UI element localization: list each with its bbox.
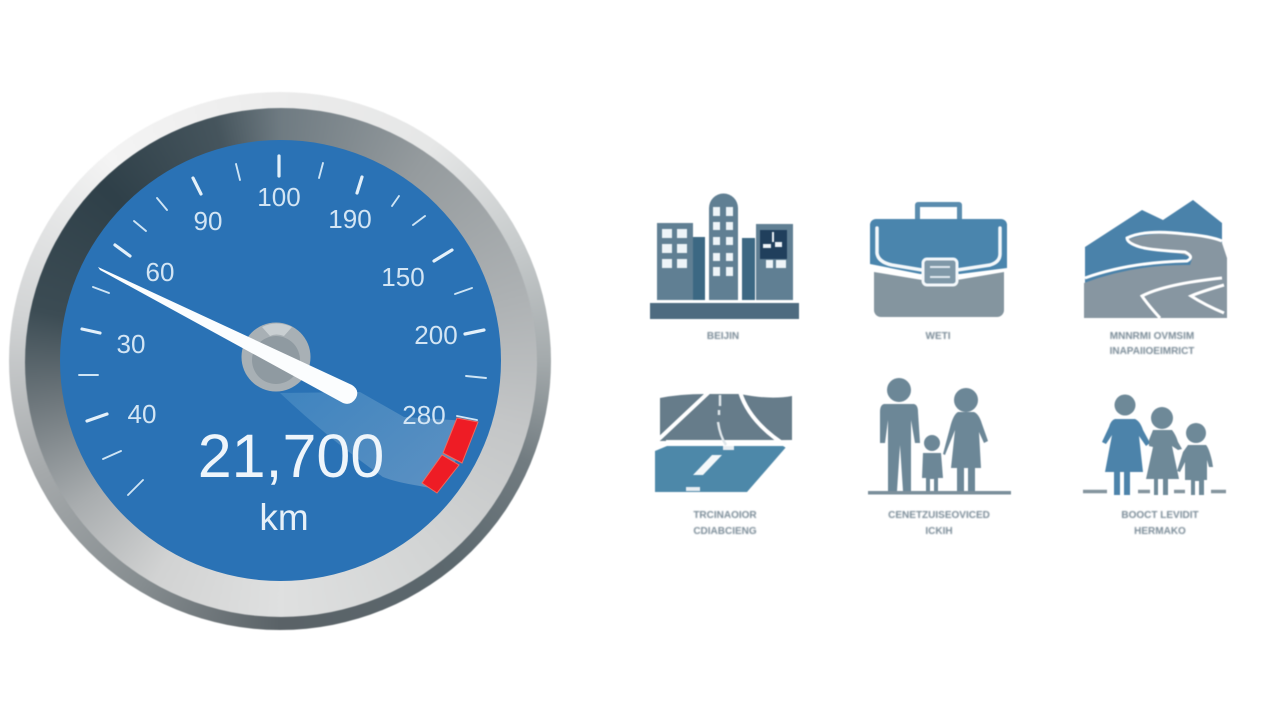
label: highway: CDIABCIENG [693, 526, 757, 537]
label: family: ICKIH [925, 526, 953, 537]
label: group [1121, 510, 1200, 537]
light reflection wedge [280, 392, 476, 490]
speed numerals: 30 [117, 329, 145, 359]
speed numerals: 190 [328, 204, 372, 234]
label: family: CENETZUISEOVICED [888, 510, 990, 521]
icon: group of three [1083, 394, 1226, 495]
icon: briefcase [870, 202, 1007, 317]
label: scenic road: INAPAIIOEIMRICT [1110, 346, 1194, 357]
speed numerals: 150 [381, 262, 425, 292]
icon: family of three [868, 378, 1011, 494]
speed numerals: 100 [257, 182, 301, 212]
odometer reading: 21,700 [198, 422, 384, 490]
hub [242, 322, 310, 392]
speedometer gauge [8, 92, 552, 631]
speed numerals: 60 [146, 257, 174, 287]
speed numerals: 90 [194, 206, 222, 236]
unit: km [259, 497, 309, 538]
label: scenic road: MNNRMI OVMSIM [1110, 331, 1194, 342]
blue dial face [60, 140, 501, 581]
icon grid [649, 192, 1228, 537]
needle [98, 267, 357, 404]
label: work: WETI [926, 331, 950, 342]
label: highway: TRCINAOIOR [693, 510, 757, 521]
red zone [422, 418, 478, 493]
speed numerals [117, 182, 458, 430]
label: scenic road [1109, 331, 1195, 357]
speed numerals: 200 [414, 320, 458, 350]
icon: city buildings [649, 192, 1228, 496]
label: city: BEIJIN [707, 331, 739, 342]
metal bezel [9, 92, 551, 630]
speed numerals: 280 [402, 400, 446, 430]
dial markings [78, 154, 487, 538]
label: highway [692, 510, 757, 537]
icon: highway [655, 392, 792, 492]
label: group: BOOCT LEVIDIT [1121, 510, 1199, 521]
label: group: HERMAKO [1134, 526, 1186, 537]
icon: mountain road [1084, 200, 1227, 318]
tick marks [79, 156, 486, 495]
inner metal band [25, 108, 537, 617]
label: family [888, 510, 990, 537]
speed numerals: 40 [128, 399, 156, 429]
